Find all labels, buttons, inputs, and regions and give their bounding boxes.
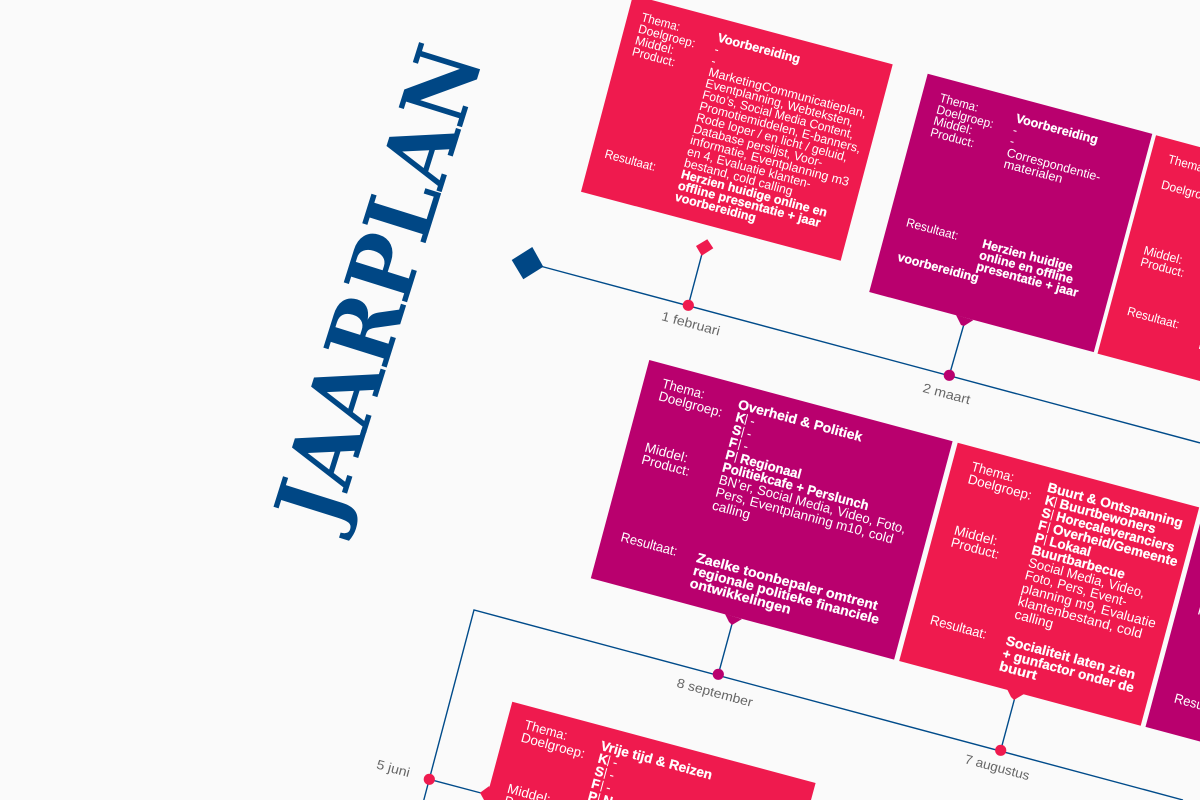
card values: P [1033,530,1046,547]
card values: S [593,763,606,780]
card values: materialen [1002,157,1064,186]
card values: Pers, Eventplanning m10, cold [714,485,895,546]
date: 1 februari: 1 februari [660,308,722,338]
card values: planning m9, Evaluatie [1020,580,1158,631]
card values: ontwikkelingen [688,575,793,617]
card labels: Product: [929,125,976,150]
card values: F [727,435,739,451]
card labels: Doelgroep: [657,388,724,420]
card labels [603,10,700,176]
card labels: Thema: [523,717,569,743]
card values: K [1043,492,1057,509]
card values [673,31,881,246]
card values: - [611,755,619,770]
card values: informatie, Eventplanning m3 [689,133,851,189]
card values [998,480,1190,711]
card values: F [590,776,602,792]
card labels: Doelgroep: [637,22,697,50]
panel: card 8 september [591,360,953,660]
card values: S [731,422,743,439]
card values: Promotiemiddelen, E-banners, [698,99,862,156]
card values: Regionaal [739,451,803,482]
card values: Lokaal [1048,534,1093,559]
pointer: card 2 maart [956,315,974,326]
card values: P [724,447,736,464]
card values: BN’er, Social Media, Video, Foto, [717,472,908,536]
card labels [619,376,727,561]
card values: Foto’s, Social Media Content, [701,88,855,142]
card values: Buurt & Ontspanning [1046,480,1185,530]
card labels: Thema: [970,459,1016,485]
timeline: upper line with markers [512,239,1200,443]
card values: Socialiteit laten zien [1004,633,1137,682]
pointer: card 5 juni [480,786,490,800]
card labels: Thema: [660,376,707,402]
card values: - [604,780,613,795]
date: 8 september: 8 september [675,675,755,710]
panel: card right, top row: Middel: [1142,243,1184,267]
card values: Eventplanning, Webteksten, [704,76,855,129]
card values: calling [1013,607,1055,631]
card labels: Product: [640,452,691,479]
card values: - [742,438,750,454]
panel: card 1 februari [581,0,893,261]
card values: - [749,413,757,429]
panel: card right, top row: Product: [1139,255,1186,280]
card labels: Doelgroep: [966,471,1033,503]
card labels: Product: [949,535,1001,562]
card labels: Middel: [932,114,974,137]
card values: Overheid & Politiek [736,397,864,445]
card values: presentatie + jaar [975,259,1080,300]
card labels: Middel: [643,440,690,466]
card values: S [1040,505,1053,522]
card values: Correspondentie- [1005,146,1102,184]
card values: - [713,42,721,57]
date: 7 augustus: 7 augustus [963,751,1032,783]
card values: Buurtbarbecue [1030,542,1127,582]
card values: Overheid/Gemeente [1051,521,1180,569]
card values: Herzien huidige [981,237,1074,274]
card values: Herzien huidige online en [680,167,829,220]
card labels: Product: [631,45,677,69]
card labels: Thema: [938,91,980,115]
card values: Voorbereiding [716,31,802,66]
panel: card right, top row: Resultaat: [1126,304,1181,332]
card values: klantenbestand, cold [1016,594,1144,641]
card values: Social Media, Video, [1027,555,1147,600]
card labels [503,717,590,800]
card values: Foto, Pers, Event- [1023,567,1129,609]
card labels: Thema: [640,10,682,34]
card labels [929,459,1037,644]
card values: Politiekcafe + Perslunch [721,459,870,513]
card values: Vrije tijd & Reizen [599,738,714,782]
card values: - [710,54,718,68]
card labels: Middel: [953,523,999,548]
card values [896,91,1120,311]
card values [586,738,714,800]
card values: K [734,409,747,426]
timeline: lower line with markers [424,610,1183,800]
card values: regionale politieke financiele [692,563,881,627]
card values: calling [711,498,752,522]
card labels: Middel: [634,33,676,57]
panel: card 7 augustus [899,443,1199,726]
pointer: card 7 augustus [1007,689,1024,700]
card labels: Doelgroep: [935,103,995,131]
card values: Horecaleveranciers [1055,509,1176,555]
card values: - [1008,134,1016,149]
card values [688,397,928,640]
card labels [905,91,998,244]
card values: bestand, cold calling [683,156,794,198]
panel: card right, middle row [1146,524,1200,742]
panel: card right, top row [1098,135,1200,381]
card values: Voorbereiding [1014,111,1100,147]
card values: voorbereiding [896,250,980,285]
card values: F [1037,517,1048,534]
card values: MarketingCommunicatieplan, [707,65,868,121]
card values: Buurtbewoners [1058,496,1158,536]
panel: card 5 juni [486,702,816,800]
card values: K [597,751,610,768]
card labels: Doelgroep: [519,730,587,761]
card values: - [1011,123,1019,138]
pointer: card 8 september [725,614,742,625]
card labels: Resultaat: [905,216,960,243]
card values: Zaelke toonbepaler omtrent [695,550,880,613]
card values: - [608,767,616,783]
date: 2 maart: 2 maart [921,380,972,407]
card labels: Resultaat: [619,529,679,559]
card values: buurt [998,658,1039,683]
card values: en 4, Evaluatie klanten- [686,144,813,191]
title: JAARPLAN [254,34,504,543]
card values: + gunfactor onder de [1001,646,1136,696]
card values: - [745,426,753,442]
card values: online en offline [978,248,1075,287]
card labels: Resultaat: [603,147,657,174]
card values: voorbereiding [673,190,758,225]
card values: offline presentatie + jaar [677,178,822,230]
date: 5 juni: 5 juni [375,757,412,780]
panel: card 2 maart [869,74,1152,352]
card values: Database perslijst, Voor- [692,122,824,170]
card values: Rode loper / en licht / geluid, [695,110,849,164]
card labels: Resultaat: [929,612,988,642]
